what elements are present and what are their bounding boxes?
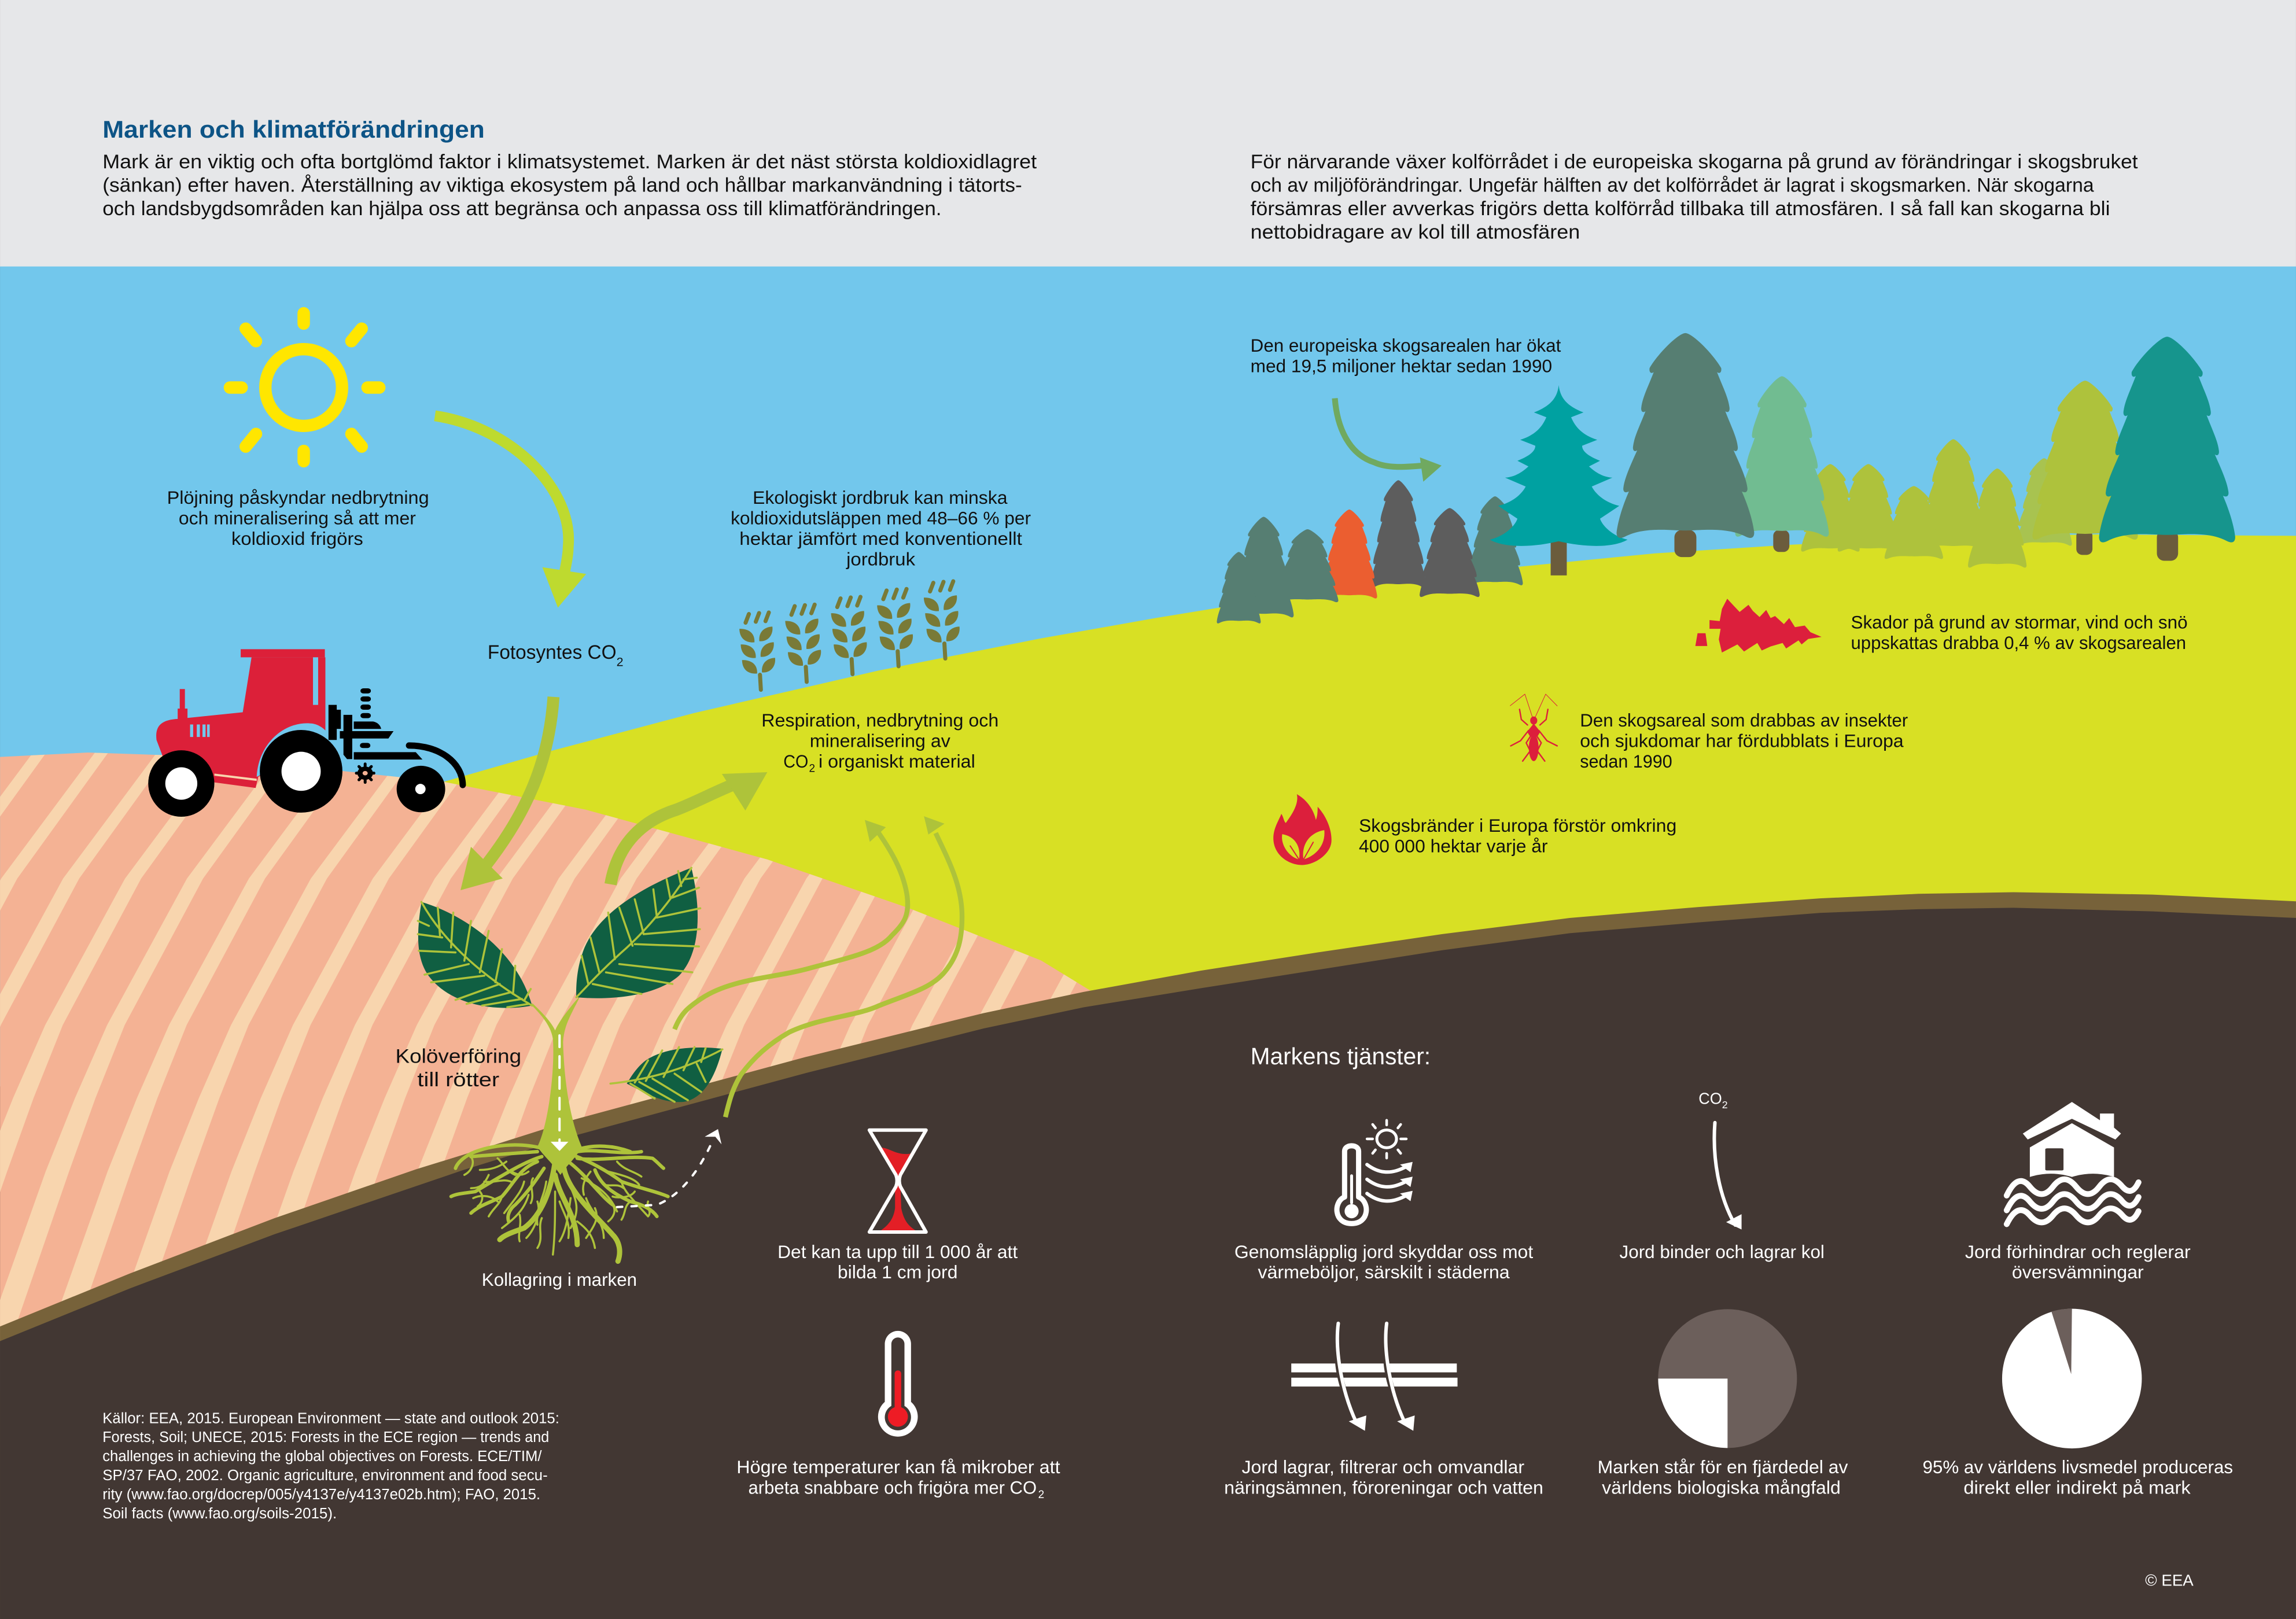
label: carbon transfer to roots [395, 1046, 521, 1091]
label: CO2 service: CO [1698, 1090, 1722, 1108]
icon: hourglass [869, 1130, 926, 1232]
text: storms [1851, 612, 2188, 653]
services icons [1291, 1102, 2139, 1431]
text: organic farming: hektar jämfört med konventionellt [739, 529, 1022, 549]
leaf left [418, 902, 532, 1008]
text: food service: 95% av världens livsmedel produceras [1923, 1457, 2233, 1477]
intro text right: nettobidragare av kol till atmosfären [1251, 222, 1580, 244]
arrow: wavy flow two [725, 816, 962, 1117]
text: filter service [1224, 1457, 1543, 1498]
icon: thermometer [878, 1331, 918, 1437]
tractor wheels [148, 750, 215, 817]
text: food service: direkt eller indirekt på mark [1963, 1477, 2191, 1498]
text: ploughing: Plöjning påskyndar nedbrytning [167, 488, 429, 508]
text: heat protection [1234, 1242, 1533, 1282]
text: respiration: i organiskt material [819, 751, 975, 772]
title: Marken och klimatförändringen [102, 116, 485, 143]
text: respiration: CO [783, 751, 808, 772]
icon: wheat [739, 581, 960, 690]
label: carbon transfer to roots: Kolöverföring [395, 1046, 521, 1068]
text: temperatures: arbeta snabbare och frigöra mer CO [748, 1477, 1037, 1498]
text: flood service: översvämningar [2012, 1262, 2144, 1282]
text: insects [1580, 710, 1908, 772]
intro text right: försämras eller avverkas frigörs detta kolförråd tillbaka till atmosfären. I så fall kan skogarna bli [1251, 198, 2110, 220]
intro text left: och landsbygdsområden kan hjälpa oss att begränsa och anpassa oss till klimatförändringen. [102, 198, 942, 220]
copyright: © EEA [2145, 1571, 2194, 1589]
sources: SP/37 FAO, 2002. Organic agriculture, environment and food secu- [102, 1466, 548, 1484]
text: forest fires [1359, 816, 1676, 857]
text: forest fires: 400 000 hektar varje år [1359, 836, 1548, 857]
text: heat protection: värmeböljor, särskilt i städerna [1258, 1262, 1510, 1282]
carbon transfer dashed arrow [558, 1035, 561, 1142]
label: carbon transfer to roots: till rötter [417, 1069, 499, 1091]
text: soil formation: bilda 1 cm jord [838, 1262, 957, 1282]
dashed carbon arrow from roots [617, 1129, 721, 1207]
text: organic farming: koldioxidutsläppen med 48–66 % per [731, 508, 1031, 529]
sources: challenges in achieving the global objectives on Forests. ECE/TIM/ [102, 1447, 542, 1465]
icon: flooded house [2007, 1102, 2139, 1224]
text: organic farming [731, 488, 1031, 570]
text: soil formation [777, 1242, 1018, 1282]
pie: biodiversity one quarter [1658, 1309, 1797, 1448]
text: ploughing: och mineralisering så att mer [179, 508, 416, 529]
arrow: sunlight to photosynthesis [435, 416, 586, 607]
tractor gear [358, 766, 373, 780]
text: insects: sedan 1990 [1580, 751, 1672, 772]
icon: tractor [148, 649, 463, 817]
arrow: forest growth [1335, 398, 1442, 482]
text: organic farming: Ekologiskt jordbruk kan minska [753, 488, 1008, 508]
text: temperatures [736, 1457, 1060, 1501]
label: photosynthesis: 2 [617, 655, 624, 669]
text: temperatures: 2 [1038, 1489, 1044, 1501]
text: heat protection: Genomsläpplig jord skyddar oss mot [1234, 1242, 1533, 1262]
pie: food 95 percent [2002, 1309, 2142, 1448]
text: temperatures: Högre temperaturer kan få mikrober att [736, 1457, 1060, 1477]
intro text right [1251, 151, 2138, 244]
label: photosynthesis: Fotosyntes CO [488, 641, 617, 663]
text: forest fires: Skogsbränder i Europa förstör omkring [1359, 816, 1676, 836]
heading: soil services: Markens tjänster: [1251, 1043, 1431, 1070]
tree trunks [1551, 530, 2178, 576]
icon: carbon arrow [1714, 1123, 1742, 1230]
text: forest area: Den europeiska skogsarealen har ökat [1251, 335, 1561, 356]
arrow: wavy flow one [675, 820, 908, 1029]
text: respiration: mineralisering av [810, 731, 950, 751]
icon: heat thermometer and sun [1337, 1120, 1413, 1223]
sources: Forests, Soil; UNECE, 2015: Forests in the ECE region — trends and [102, 1428, 549, 1445]
text: respiration: 2 [809, 762, 815, 775]
text: insects: och sjukdomar har fördubblats i Europa [1580, 731, 1904, 751]
icon: soil filter [1291, 1323, 1458, 1431]
label: CO2 service: 2 [1722, 1099, 1728, 1111]
intro text left [102, 151, 1037, 220]
topsoil band [0, 893, 2296, 1619]
text: ploughing: koldioxid frigörs [231, 529, 363, 549]
ploughed field with stripes [0, 753, 1091, 1341]
sources: rity (www.fao.org/docrep/005/y4137e/y4137e02b.htm); FAO, 2015. [102, 1485, 540, 1503]
yellow-green hill [444, 534, 2296, 1025]
header band [0, 0, 2296, 267]
icon: sun [230, 314, 379, 461]
text: biodiversity service [1598, 1457, 1848, 1498]
intro text right: För närvarande växer kolförrådet i de europeiska skogarna på grund av förändringar i skogsbruket [1251, 151, 2138, 173]
text: respiration [761, 710, 998, 775]
text: storms: uppskattas drabba 0,4 % av skogsarealen [1851, 633, 2186, 653]
tractor body [156, 657, 325, 788]
trees: damaged small trees [1217, 480, 1480, 624]
trees: large forest [1467, 333, 2235, 585]
label: carbon storage: Kollagring i marken [482, 1270, 637, 1290]
text: biodiversity service: Marken står för en fjärdedel av [1598, 1457, 1848, 1477]
plant with roots [418, 868, 926, 1261]
icon: forest fire [1273, 794, 1332, 865]
sky [0, 267, 2296, 1086]
text: flood service [1965, 1242, 2191, 1282]
intro text right: och av miljöförändringar. Ungefär hälften av det kolförrådet är lagrat i skogsmarken. När skogarna [1251, 175, 2094, 197]
text: filter service: Jord lagrar, filtrerar och omvandlar [1241, 1457, 1524, 1477]
sources: Källor: EEA, 2015. European Environment — state and outlook 2015: [102, 1409, 559, 1426]
icon: insect [1510, 694, 1557, 761]
text: respiration: Respiration, nedbrytning och [761, 710, 998, 731]
text: storms: Skador på grund av stormar, vind och snö [1851, 612, 2188, 632]
arrow: respiration [611, 772, 767, 884]
trees: small olive group [1801, 439, 2072, 567]
text: forest area: med 19,5 miljoner hektar sedan 1990 [1251, 356, 1552, 376]
text: organic farming: jordbruk [846, 549, 915, 570]
fallen leaf [610, 1047, 723, 1102]
sources [102, 1409, 559, 1522]
text: insects: Den skogsareal som drabbas av insekter [1580, 710, 1908, 731]
tractor implement [329, 705, 422, 759]
text: flood service: Jord förhindrar och reglerar [1965, 1242, 2191, 1262]
sources: Soil facts (www.fao.org/soils-2015). [102, 1504, 337, 1522]
intro text left: Mark är en viktig och ofta bortglömd faktor i klimatsystemet. Marken är det näst största koldioxidlagret [102, 151, 1037, 173]
text: ploughing [167, 488, 429, 549]
plant roots [451, 1145, 668, 1261]
soil [0, 908, 2296, 1619]
text: food service [1923, 1457, 2233, 1498]
plant stem [532, 995, 581, 1175]
text: filter service: näringsämnen, föroreningar och vatten [1224, 1477, 1543, 1498]
text: carbon storage service: Jord binder och lagrar kol [1620, 1242, 1825, 1262]
arrow: photosynthesis to leaves [460, 697, 554, 890]
icon: fallen tree [1696, 599, 1822, 652]
text: soil formation: Det kan ta upp till 1 000 år att [777, 1242, 1018, 1262]
text: forest area [1251, 335, 1561, 376]
leaf right [576, 868, 701, 998]
intro text left: (sänkan) efter haven. Återställning av viktiga ekosystem på land och hållbar markanvändning i tätorts- [102, 175, 1022, 197]
text: biodiversity service: världens biologiska mångfald [1602, 1477, 1841, 1498]
